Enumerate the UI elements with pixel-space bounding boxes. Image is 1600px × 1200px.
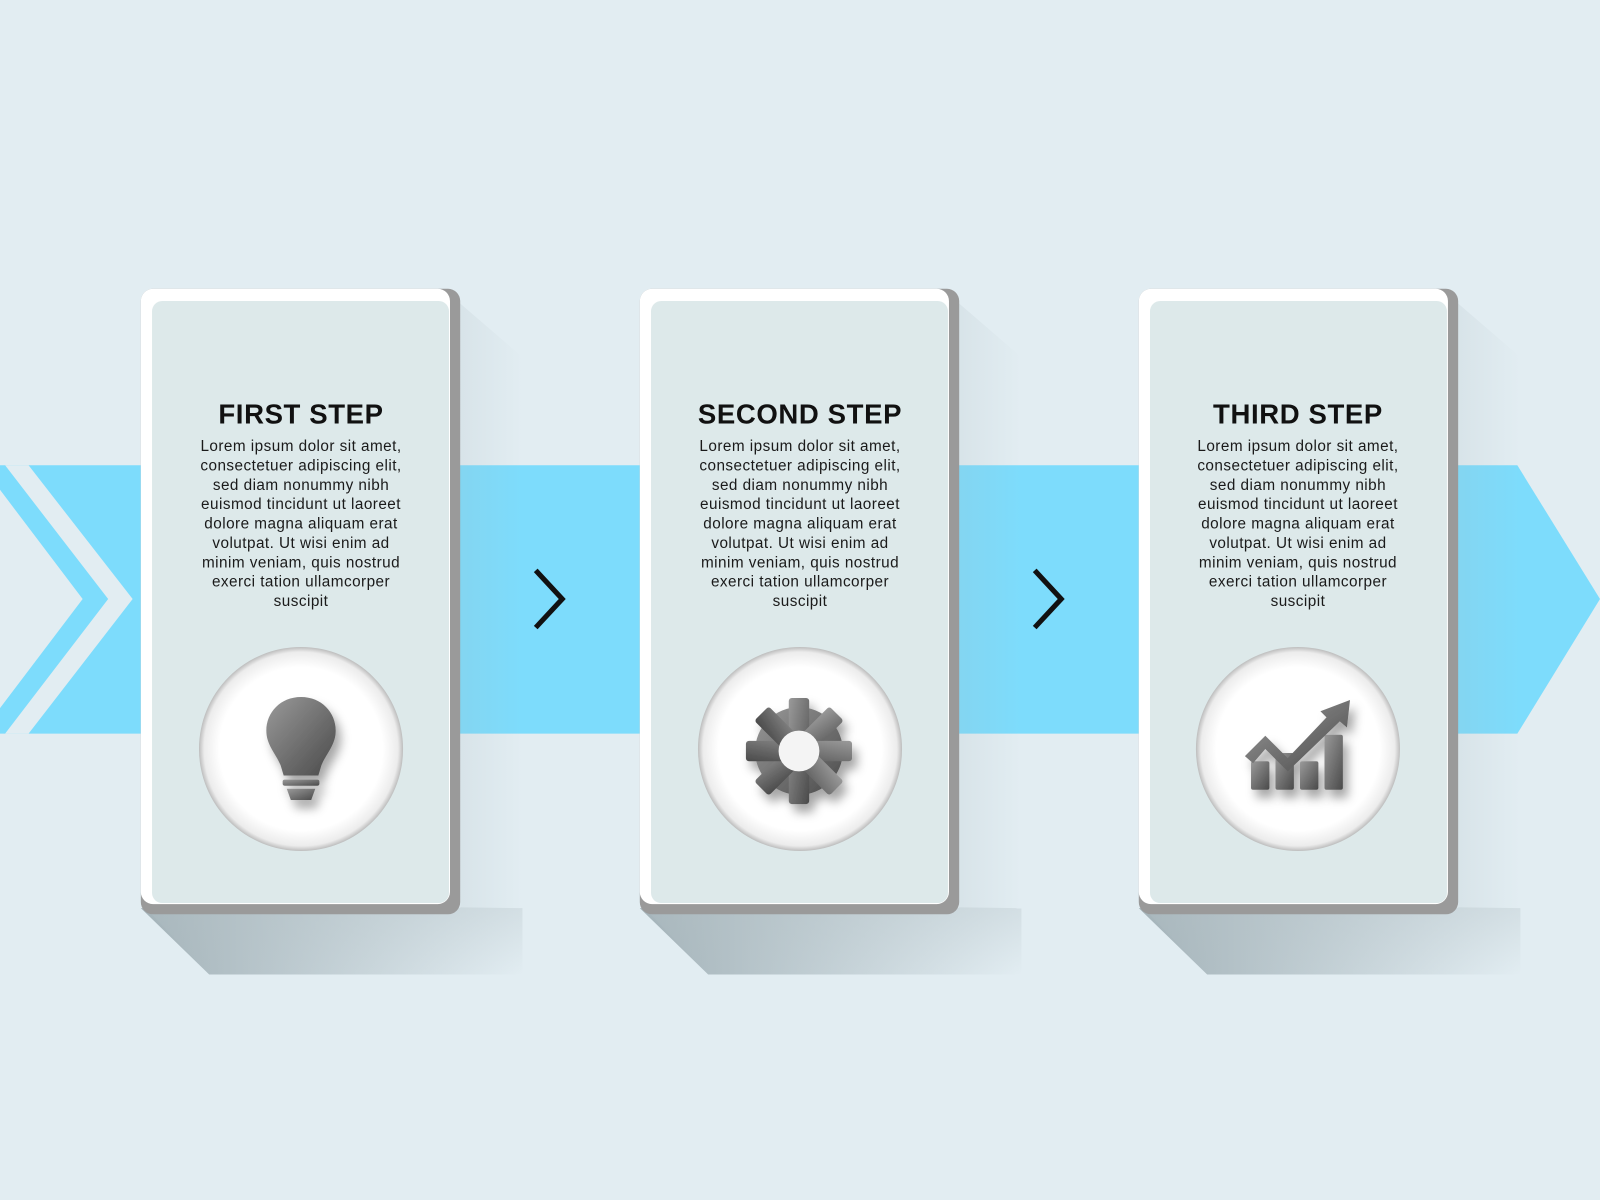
body text 3: dolore magna aliquam erat: [1201, 516, 1395, 533]
title: second step: SECOND STEP: [698, 398, 902, 429]
card 1: [141, 289, 522, 974]
body text 3: minim veniam, quis nostrud: [1199, 554, 1397, 571]
title: first step: FIRST STEP: [218, 398, 384, 429]
body text 1: volutpat. Ut wisi enim ad: [212, 535, 390, 552]
body text 3: euismod tincidunt ut laoreet: [1198, 496, 1398, 513]
body text 2: euismod tincidunt ut laoreet: [700, 496, 900, 513]
body text 2: exerci tation ullamcorper: [711, 574, 889, 591]
icon circle: lightbulb: [199, 647, 403, 851]
body text 2: consectetuer adipiscing elit,: [699, 457, 901, 474]
card 3: [1139, 289, 1520, 974]
icon circle: gear: [698, 647, 902, 851]
arrow chevron 2: [1035, 570, 1061, 628]
body text 2: Lorem ipsum dolor sit amet,: [699, 438, 901, 455]
body text 1: Lorem ipsum dolor sit amet,: [200, 438, 402, 455]
body text 3: consectetuer adipiscing elit,: [1197, 457, 1399, 474]
body text 2: minim veniam, quis nostrud: [701, 554, 899, 571]
body text 2: volutpat. Ut wisi enim ad: [711, 535, 889, 552]
body text 1: minim veniam, quis nostrud: [202, 554, 400, 571]
card 2: [640, 289, 1021, 974]
body text 3: sed diam nonummy nibh: [1210, 477, 1386, 494]
body text 2: suscipit: [773, 593, 828, 610]
body text 1: sed diam nonummy nibh: [213, 477, 389, 494]
body text 1: euismod tincidunt ut laoreet: [201, 496, 401, 513]
icon circle: growth chart: [1196, 647, 1400, 851]
body text 1: exerci tation ullamcorper: [212, 574, 390, 591]
body text 3: suscipit: [1271, 593, 1326, 610]
body text 2: sed diam nonummy nibh: [712, 477, 888, 494]
body text 3: Lorem ipsum dolor sit amet,: [1197, 438, 1399, 455]
title: third step: THIRD STEP: [1213, 398, 1383, 429]
body text 1: consectetuer adipiscing elit,: [200, 457, 402, 474]
body text 3: exerci tation ullamcorper: [1209, 574, 1387, 591]
body text 2: dolore magna aliquam erat: [703, 516, 897, 533]
body text 3: volutpat. Ut wisi enim ad: [1209, 535, 1387, 552]
body text 1: dolore magna aliquam erat: [204, 516, 398, 533]
body text 1: suscipit: [274, 593, 329, 610]
arrow chevron 1: [536, 570, 562, 628]
blue arrow band: [0, 465, 1600, 734]
